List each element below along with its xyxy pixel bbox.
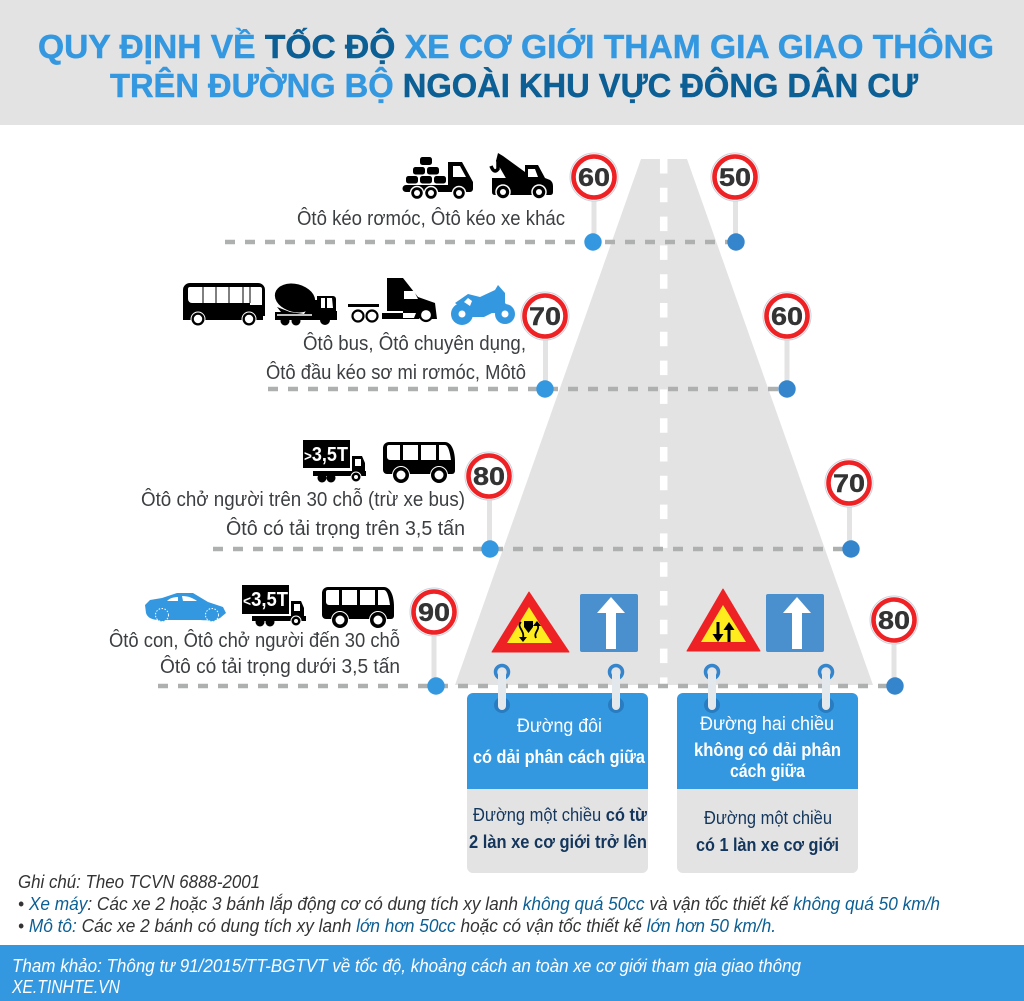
speed sign 70 left with post	[521, 292, 569, 398]
title: TRÊN ĐƯỜNG BỘ NGOÀI KHU VỰC ĐÔNG DÂN CƯ	[110, 66, 919, 104]
icon: warning sign two-way	[687, 589, 760, 651]
row 4: cars and light trucks	[109, 585, 918, 695]
notes	[18, 872, 940, 936]
icon: truck over 3.5 tons	[303, 440, 366, 482]
card description: Đường một chiều	[704, 808, 832, 828]
icon: mixer truck	[272, 279, 337, 326]
card: two-way road	[677, 693, 858, 873]
icon: coach	[383, 442, 455, 484]
card description: Đường một chiều có từ	[473, 805, 648, 825]
icon: truck under 3.5 tons: <3,5T	[243, 589, 288, 611]
footer band: Tham khảo: Thông tư 91/2015/TT-BGTVT về tốc độ, khoảng cách an toàn xe cơ giới tham gia giao thông	[12, 956, 801, 976]
card heading: có dải phân cách giữa	[473, 747, 646, 767]
speed sign 80 right with post	[870, 596, 918, 695]
icon: one-way sign right	[766, 594, 824, 652]
label: row 3 vehicles	[141, 488, 465, 540]
icon: car	[145, 593, 226, 622]
footer band	[0, 945, 1024, 1001]
icon: truck under 3.5 tons	[242, 585, 306, 626]
speed sign 70 right with post	[825, 459, 873, 558]
label: row 2 vehicles	[266, 332, 526, 384]
card description	[696, 808, 839, 855]
icon: tow truck	[491, 153, 553, 199]
card: divided road	[467, 693, 648, 873]
header band	[0, 0, 1024, 125]
label: row 2 vehicles: Ôtô bus, Ôtô chuyên dụng,	[303, 332, 526, 355]
notes: • Xe máy: Các xe 2 hoặc 3 bánh lắp động cơ có dung tích xy lanh không quá 50cc và vận tốc thiết kế không quá 50 km/h	[18, 894, 940, 914]
speed sign 90 left with post: 90	[418, 599, 450, 627]
card heading	[694, 714, 841, 781]
sign hanging rings and poles	[496, 666, 832, 706]
icon: semi truck	[348, 278, 437, 322]
label: row 4 vehicles	[109, 629, 400, 678]
notes: • Mô tô: Các xe 2 bánh có dung tích xy lanh lớn hơn 50cc hoặc có vận tốc thiết kế lớn hơn 50 km/h.	[18, 916, 776, 936]
icon: warning sign divided road	[492, 592, 569, 652]
card description	[469, 805, 648, 852]
speed sign 60 right with post	[763, 292, 811, 398]
icon: brick truck	[403, 157, 473, 200]
label: row 2 vehicles: Ôtô đầu kéo sơ mi rơmóc, Môtô	[266, 361, 526, 384]
icon: motorbike	[451, 285, 515, 325]
speed sign 60 left with post: 60	[578, 164, 610, 192]
footer band: XE.TINHTE.VN	[11, 977, 121, 997]
speed sign 70 right with post: 70	[833, 470, 865, 498]
title	[38, 27, 994, 104]
speed sign 50 right with post: 50	[719, 164, 751, 192]
speed sign 60 left with post	[570, 153, 618, 251]
notes: Ghi chú: Theo TCVN 6888-2001	[18, 872, 260, 892]
row 3: heavy trucks and large coaches	[141, 440, 873, 558]
dashed line row 3	[213, 547, 850, 551]
card heading: Đường hai chiều	[700, 714, 834, 735]
label: row 1 vehicles: Ôtô kéo rơmóc, Ôtô kéo xe khác	[297, 207, 565, 230]
card heading: không có dải phân	[694, 740, 841, 760]
speed sign 70 left with post: 70	[529, 303, 561, 331]
speed sign 60 right with post: 60	[771, 303, 803, 331]
label: row 4 vehicles: Ôtô có tải trọng dưới 3,5 tấn	[160, 655, 400, 678]
card description: có 1 làn xe cơ giới	[696, 835, 839, 855]
row 2: bus, special vehicles, semi, motorbike	[183, 278, 811, 398]
dashed line row 4	[158, 684, 890, 688]
dashed line row 2	[268, 387, 785, 391]
icon: truck over 3.5 tons: >3,5T	[304, 444, 348, 466]
speed sign 80 left with post	[465, 452, 513, 558]
road	[455, 159, 873, 685]
label: row 3 vehicles: Ôtô chở người trên 30 chỗ (trừ xe bus)	[141, 488, 465, 511]
dashed line row 1	[225, 240, 730, 244]
card heading	[473, 716, 646, 767]
icon: bus	[183, 283, 265, 326]
row 1: trailer and tow trucks	[225, 153, 759, 251]
icon: small bus	[322, 587, 394, 628]
icon: one-way sign left	[580, 594, 638, 652]
card description: 2 làn xe cơ giới trở lên	[469, 832, 647, 852]
card heading: cách giữa	[730, 761, 806, 781]
card heading: Đường đôi	[517, 716, 602, 737]
speed sign 50 right with post	[711, 153, 759, 251]
title: QUY ĐỊNH VỀ TỐC ĐỘ XE CƠ GIỚI THAM GIA GIAO THÔNG	[38, 27, 994, 65]
label: row 4 vehicles: Ôtô con, Ôtô chở người đến 30 chỗ	[109, 629, 400, 652]
speed sign 80 right with post: 80	[878, 607, 910, 635]
speed sign 80 left with post: 80	[473, 463, 505, 491]
speed sign 90 left with post	[410, 588, 458, 695]
label: row 3 vehicles: Ôtô có tải trọng trên 3,5 tấn	[226, 517, 465, 540]
